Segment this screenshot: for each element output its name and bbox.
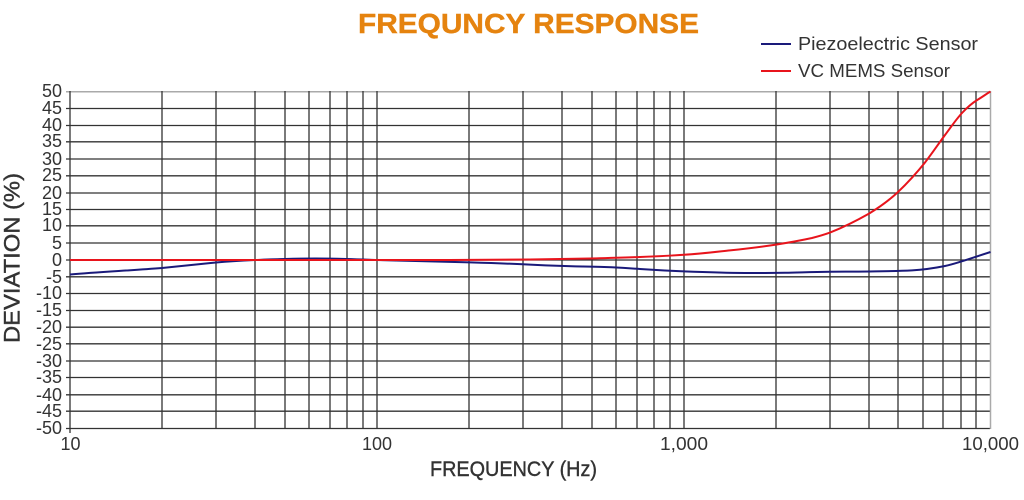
line: Piezoelectric Sensor bbox=[70, 252, 990, 274]
y-axis tick labels: -5 bbox=[46, 267, 62, 287]
legend entry: VC MEMS Sensor: VC MEMS Sensor bbox=[798, 61, 950, 81]
y-axis title: DEVIATION (%) bbox=[0, 173, 24, 343]
horizontal grid lines bbox=[66, 108, 990, 428]
vertical grid lines bbox=[70, 91, 976, 433]
y-axis tick labels: 30 bbox=[42, 149, 62, 169]
x-axis tick labels bbox=[60, 434, 1019, 454]
y-axis tick labels bbox=[36, 81, 62, 438]
y-axis tick labels: 35 bbox=[42, 131, 62, 151]
y-axis tick labels: 50 bbox=[42, 81, 62, 101]
x-axis title: FREQUENCY (Hz) bbox=[430, 457, 597, 481]
y-axis tick labels: 40 bbox=[42, 115, 62, 135]
y-axis tick labels: -50 bbox=[36, 418, 62, 438]
legend bbox=[761, 34, 978, 81]
legend entry: Piezoelectric Sensor: Piezoelectric Sensor bbox=[798, 34, 978, 54]
y-axis tick labels: -30 bbox=[36, 351, 62, 371]
y-axis tick labels: 45 bbox=[42, 98, 62, 118]
y-axis tick labels: -10 bbox=[36, 283, 62, 303]
y-axis tick labels: 20 bbox=[42, 183, 62, 203]
y-axis tick labels: 0 bbox=[52, 250, 62, 270]
chart: frequency response bbox=[66, 91, 990, 433]
top border and right border bbox=[66, 91, 990, 429]
y-axis tick labels: -20 bbox=[36, 317, 62, 337]
y-axis tick labels: 5 bbox=[52, 233, 62, 253]
x-axis tick labels: 100 bbox=[362, 434, 392, 454]
y-axis tick labels: -25 bbox=[36, 334, 62, 354]
y-axis tick labels: -35 bbox=[36, 367, 62, 387]
title: FREQUNCY RESPONSE bbox=[358, 8, 699, 39]
x-axis tick labels: 10,000 bbox=[962, 434, 1019, 454]
line: VC MEMS Sensor bbox=[70, 92, 990, 260]
y-axis tick labels: 10 bbox=[42, 215, 62, 235]
x-axis tick labels: 1,000 bbox=[660, 434, 708, 454]
y-axis tick labels: -45 bbox=[36, 401, 62, 421]
y-axis tick labels: 15 bbox=[42, 199, 62, 219]
y-axis tick labels: -40 bbox=[36, 385, 62, 405]
x-axis tick labels: 10 bbox=[60, 434, 81, 454]
y-axis tick labels: 25 bbox=[42, 165, 62, 185]
y-axis tick labels: -15 bbox=[36, 300, 62, 320]
